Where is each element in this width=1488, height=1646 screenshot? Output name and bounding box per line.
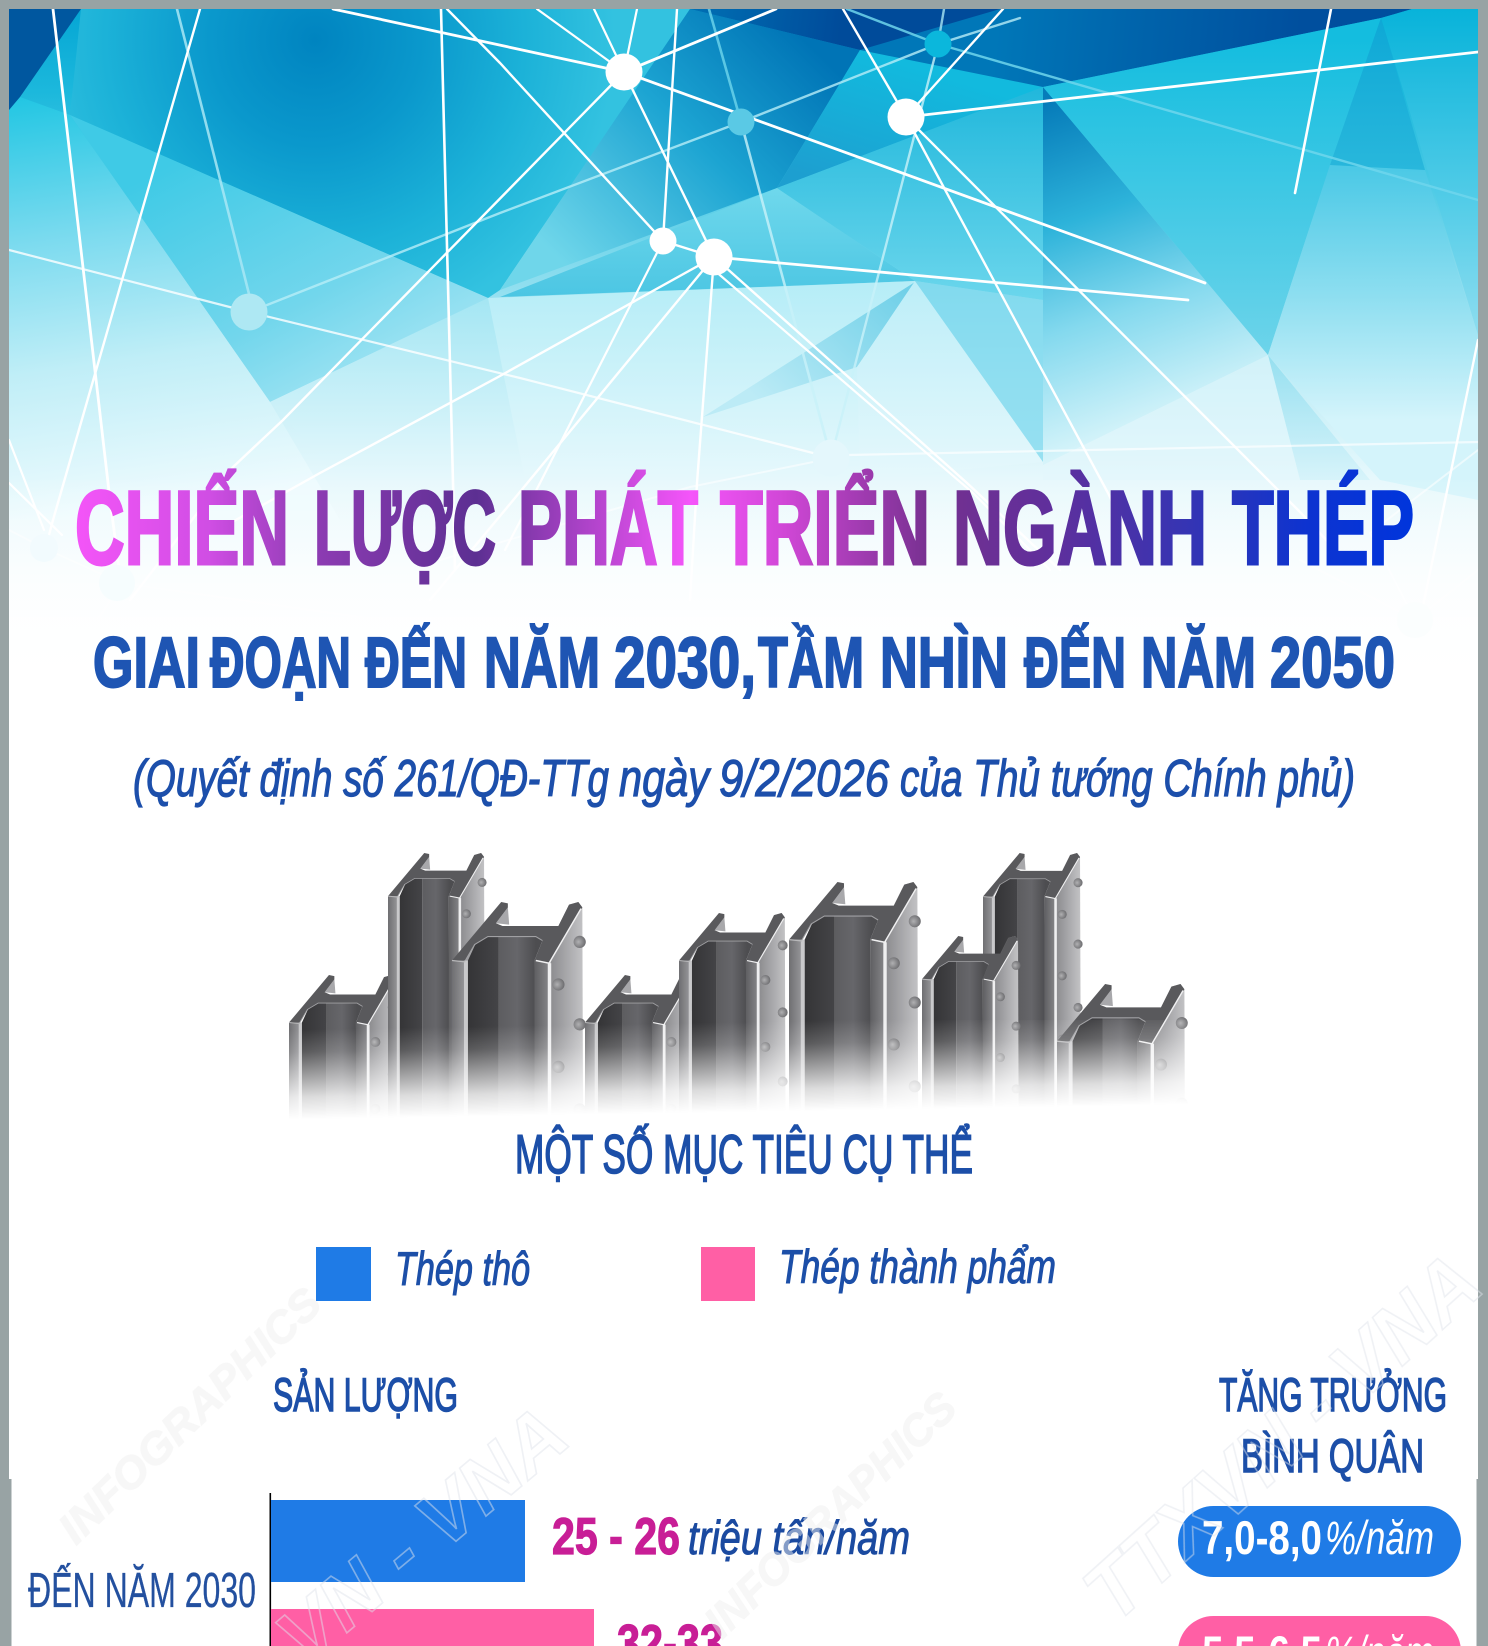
network of lines and nodes <box>9 9 1478 552</box>
main title <box>75 469 1414 587</box>
watermarks: INFOGRAPHICS <box>695 1383 966 1646</box>
growth pill: crude steel: 7,0-8,0 <box>1202 1511 1322 1564</box>
legend <box>316 1240 1056 1301</box>
growth pill: finished steel <box>1178 1616 1461 1646</box>
main title: NGÀNH <box>953 469 1207 587</box>
legend: finished steel swatch <box>701 1247 755 1301</box>
chart axis <box>270 1493 271 1646</box>
bar: finished steel <box>271 1609 594 1646</box>
watermarks <box>49 1236 1488 1646</box>
growth pill: crude steel: %/năm <box>1325 1511 1434 1564</box>
subtitle: ĐẾN <box>1024 624 1126 703</box>
main title: LƯỢC <box>314 470 496 587</box>
main title: PHÁT <box>518 469 698 587</box>
subtitle: 2030, <box>614 624 756 703</box>
decision reference line: (Quyết định số 261/QĐ-TTg <box>133 750 609 808</box>
main title: TRIỂN <box>720 469 930 587</box>
hero polygon background <box>9 9 1478 552</box>
value: crude steel output: triệu tấn/năm <box>688 1511 910 1564</box>
subtitle: ĐOẠN <box>210 624 351 703</box>
steel beams illustration <box>289 853 1188 1114</box>
bright network lines <box>9 9 1478 552</box>
subtitle: NĂM <box>1141 624 1256 703</box>
subtitle: NĂM <box>484 624 600 703</box>
subtitle: 2050 <box>1270 624 1395 703</box>
growth pill: crude steel <box>1178 1506 1461 1577</box>
network nodes <box>42 30 952 591</box>
watermarks: INFOGRAPHICS <box>49 1278 331 1553</box>
decision reference line: ngày <box>619 750 711 808</box>
subtitle: GIAI <box>93 624 200 703</box>
bar: crude steel <box>271 1500 525 1582</box>
subtitle: NHÌN <box>880 624 1008 703</box>
decision reference line <box>133 750 1355 808</box>
legend: finished steel label: Thép thành phẩm <box>779 1240 1056 1293</box>
legend: crude steel label: Thép thô <box>395 1242 530 1295</box>
subtitle <box>93 624 1395 703</box>
decision reference line: 9/2/2026 <box>719 750 889 808</box>
value: crude steel output: 25 - 26 <box>552 1508 680 1566</box>
pale network lines <box>9 9 1478 514</box>
column heading: average growth <box>1219 1368 1447 1482</box>
bar chart: output to 2030 <box>270 1493 910 1646</box>
subtitle: TẦM <box>758 624 864 703</box>
legend: crude steel swatch <box>316 1247 371 1301</box>
main title: CHIẾN <box>75 469 289 587</box>
subtitle: ĐẾN <box>365 624 467 703</box>
value: crude steel output <box>552 1508 910 1566</box>
row label: to 2030: ĐẾN NĂM 2030 <box>28 1564 256 1618</box>
column heading: output: SẢN LƯỢNG <box>273 1368 458 1421</box>
section heading: MỘT SỐ MỤC TIÊU CỤ THỂ <box>515 1123 973 1185</box>
